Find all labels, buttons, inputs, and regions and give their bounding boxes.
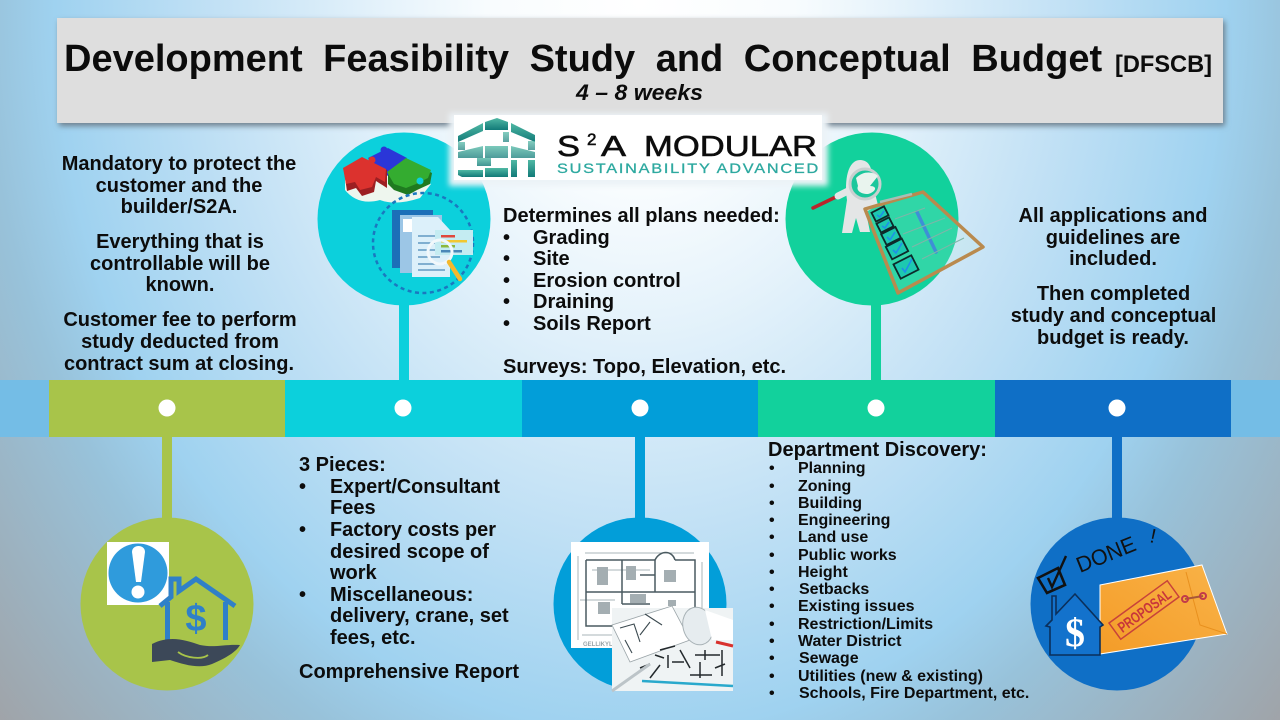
text block: 3 pieces: • [299,476,306,498]
text block: 3 pieces: work [329,562,378,584]
text block: applications: budget is ready. [1037,327,1189,349]
text block: department discovery: Public works [798,547,897,564]
text block: department discovery: • [769,685,775,702]
text block: department discovery: Restriction/Limits [798,616,933,633]
text block: 3 pieces: fees, etc. [330,627,416,649]
text block: 3 pieces: • [299,519,306,541]
text block: plans needed: • [503,291,510,313]
timeline bar [0,380,1280,437]
text block: department discovery: Engineering [798,512,890,529]
text block: department discovery: • [769,512,775,529]
text block: department discovery: Existing issues [798,598,915,615]
text block: department discovery: • [769,529,775,546]
step 2 connector and circle [318,132,490,380]
text block: plans needed: Surveys: Topo, Elevation, etc. [503,356,786,378]
icon: floor plan sheet: GELLIKYLO [583,642,618,648]
text block: plans needed: Draining [533,291,614,313]
step 1 connector and circle [80,437,254,690]
text block: why mandatory: study deducted from [81,331,279,353]
title banner [57,18,1225,126]
text block: department discovery: Setbacks [799,581,869,598]
text block: department discovery: • [769,616,775,633]
text block: department discovery: Utilities (new & existing) [798,668,983,685]
text block: 3 pieces: Miscellaneous: [330,584,473,606]
icon: done check: DONE [1073,531,1139,578]
text block: plans needed: Grading [533,227,610,249]
text block: 3 pieces: Fees [330,497,376,519]
text block: department discovery: Water District [798,633,902,650]
step 3 connector and circle [554,437,733,691]
text block: department discovery: • [769,581,775,598]
duration subtitle: 4 – 8 weeks [575,80,703,105]
title: [DFSCB] [1115,51,1212,78]
text block: department discovery: • [769,633,775,650]
text block: department discovery: Land use [798,529,868,546]
text block: 3 pieces: desired scope of [330,541,489,563]
text block: why mandatory: controllable will be [90,253,270,275]
text block: why mandatory: contract sum at closing. [64,353,294,375]
text block: why mandatory: builder/S2A. [121,196,237,218]
text block: plans needed [503,205,786,378]
text block: 3 pieces: 3 Pieces: [299,454,386,476]
text block: department discovery: Height [798,564,848,581]
logo wordmark: A [601,131,627,163]
text block: department discovery: • [769,564,775,581]
step 4 connector and circle [786,132,983,380]
text block: 3 pieces: delivery, crane, set [330,605,509,627]
icon: documents under magnifier [373,193,473,293]
logo [449,113,828,186]
icon: house with dollar in hand: $ [185,598,207,640]
icon: house with dollar [1046,594,1103,655]
logo wordmark: MODULAR [644,131,817,163]
text block: department discovery: Sewage [799,650,859,667]
text block: 3 pieces: Expert/Consultant [330,476,500,498]
icon: figure with magnifier [813,160,880,233]
text block: why mandatory: Mandatory to protect the [62,153,296,175]
text block: plans needed: • [503,313,510,335]
logo wordmark: S [557,131,580,163]
text block: plans needed: • [503,248,510,270]
text block: plans needed: • [503,270,510,292]
icon: exclamation [107,542,169,605]
text block: 3 pieces: • [299,584,306,606]
logo wordmark: 2 [587,130,596,149]
text block: why mandatory: customer and the [96,175,262,197]
text block: department discovery: Planning [798,460,866,477]
text block: plans needed: Site [533,248,570,270]
icon: house with dollar: $ [1065,610,1085,655]
text block: why mandatory: Everything that is [96,231,264,253]
text block: applications: study and conceptual [1011,305,1216,327]
logo wordmark: SUSTAINABILITY ADVANCED [557,160,820,176]
text block: plans needed: • [503,227,510,249]
icon: puzzle pieces [343,146,432,203]
text block: department discovery: • [769,598,775,615]
text block: department discovery [768,439,1029,702]
text block: department discovery: Department Discovery: [768,439,987,461]
text block: applications: guidelines are [1046,227,1180,249]
text block: applications: All applications and [1019,205,1207,227]
text block: 3 pieces: Comprehensive Report [299,661,519,683]
text block: 3 pieces [299,454,519,683]
icon: clipboard checklist [865,192,983,293]
text block: department discovery: • [769,650,775,667]
text block: department discovery: • [769,478,775,495]
logo wordmark [557,130,820,176]
text block: applications [1011,205,1216,349]
text block: department discovery: • [769,668,775,685]
step 5 connector and circle [1030,437,1227,690]
icon: proposal envelope: PROPOSAL [1115,586,1175,636]
icon: rolled blueprints [612,604,733,691]
icon: proposal envelope [1100,565,1227,654]
text block: why mandatory: Customer fee to perform [63,309,297,331]
text block: department discovery: • [769,547,775,564]
text block: department discovery: • [769,495,775,512]
icon: floor plan sheet [571,542,709,648]
icon: done check: ! [1148,525,1158,548]
text block: plans needed: Erosion control [533,270,681,292]
text block: plans needed: Determines all plans needed: [503,205,780,227]
text block: department discovery: Zoning [798,478,851,495]
icon: house with dollar in hand [152,579,240,666]
text block: 3 pieces: Factory costs per [330,519,496,541]
text block: why mandatory: known. [146,274,214,296]
icon: done check [1038,525,1158,593]
text block: department discovery: Schools, Fire Department, etc. [799,685,1029,702]
text block: applications: Then completed [1037,283,1190,305]
title: Development Feasibility Study and Conceptual Budget [64,38,1102,80]
text block: department discovery: • [769,460,775,477]
text block: applications: included. [1069,248,1157,270]
text block: why mandatory [62,153,297,375]
text block: plans needed: Soils Report [533,313,651,335]
logo mark: building [458,118,535,177]
text block: department discovery: Building [798,495,862,512]
